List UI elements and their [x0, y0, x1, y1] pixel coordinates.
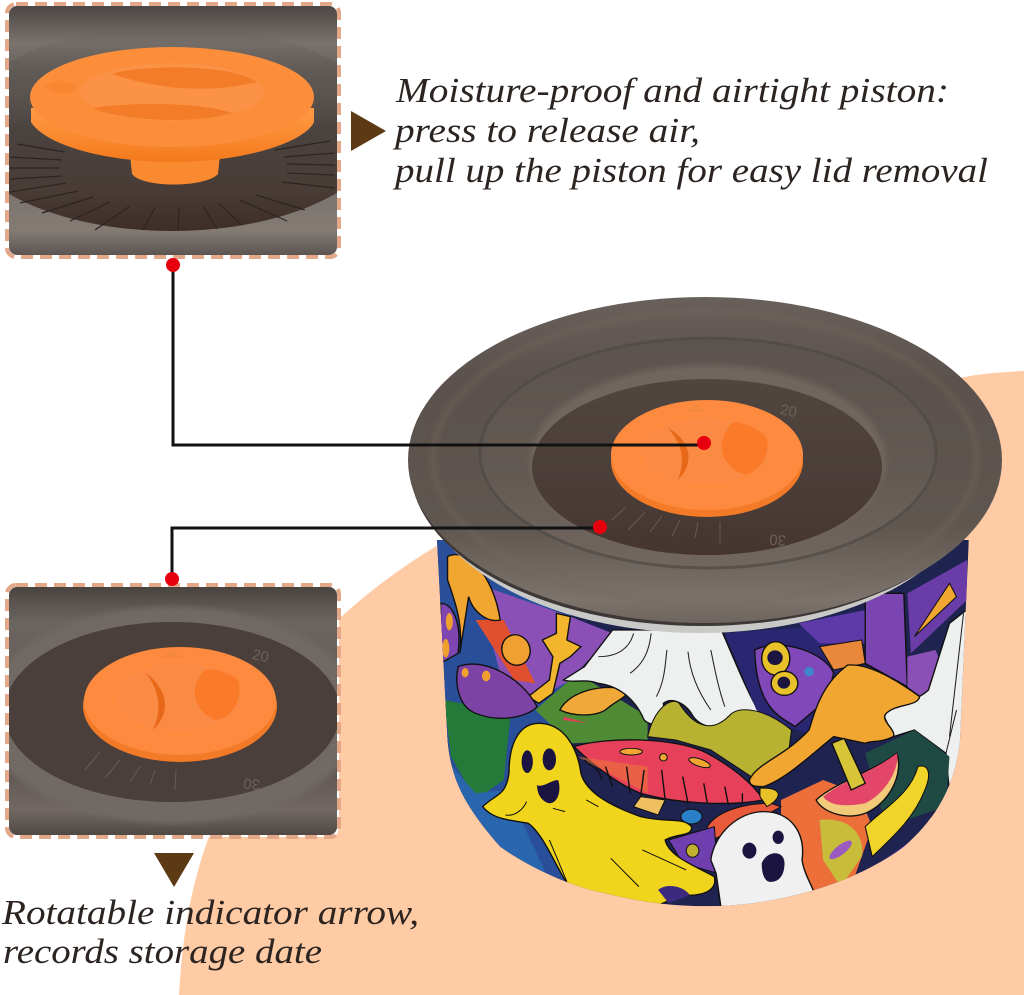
product: decorated can body [430, 540, 980, 920]
arrow: down pointing to indicator text [154, 853, 194, 887]
text block: piston description: pull up the piston for easy lid removal [392, 151, 988, 190]
photo panel: rotatable arrow close-up: 20 [251, 646, 270, 666]
piston cap [30, 47, 314, 162]
photo panel: rotatable arrow close-up: 30 [243, 774, 261, 793]
connector line: piston [166, 258, 711, 450]
product: lid with indicator knob: 20 [779, 401, 798, 421]
product: lid with indicator knob: 30 [769, 530, 787, 549]
text block: indicator description: records storage date [3, 932, 322, 971]
indicator knob on lid [611, 400, 803, 517]
knob [83, 647, 277, 762]
text block: piston description: Moisture-proof and airtight piston: [395, 71, 949, 110]
peach background shape [179, 371, 1024, 995]
product: lid with indicator knob [408, 297, 1002, 633]
text block: indicator description: Rotatable indicator arrow, [1, 893, 419, 932]
text block: piston description [392, 71, 988, 190]
piston stem [130, 159, 220, 184]
connector line: indicator arrow [165, 520, 607, 586]
arrow: right pointing to piston text [351, 111, 386, 151]
text block: indicator description [1, 893, 419, 971]
photo panel: piston close-up [5, 2, 341, 259]
text block: piston description: press to release air, [392, 111, 700, 150]
photo panel: rotatable arrow close-up [0, 585, 362, 837]
